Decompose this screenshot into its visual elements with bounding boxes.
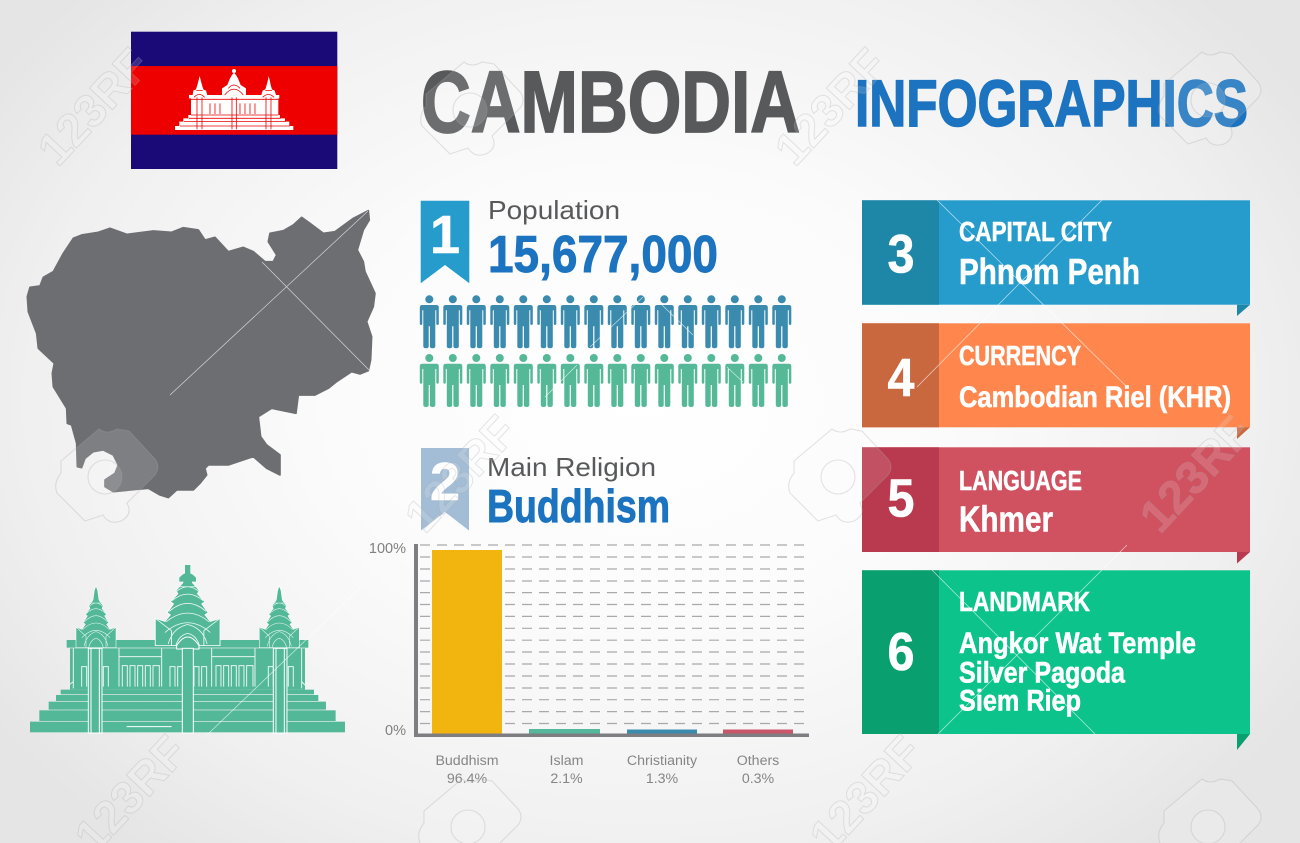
main religion value: Buddhism: [487, 480, 670, 532]
panel 5: language: Khmer: [959, 499, 1053, 540]
pictogram row: blue people: [420, 295, 791, 348]
panel 5: language: [862, 447, 1250, 564]
bar: Others: [723, 730, 793, 734]
panel 6: landmark: Silver Pagoda: [959, 657, 1125, 690]
panel 4: currency: 4: [888, 348, 914, 408]
panel 6: landmark: [862, 570, 1250, 750]
bar: Christianity: [627, 730, 697, 734]
category label: Others: 0.3%: [742, 771, 775, 787]
bar: Islam: [529, 729, 600, 734]
category label: Others: Others: [737, 753, 779, 769]
bar: Buddhism: [432, 550, 502, 734]
panel 6: landmark: Siem Riep: [959, 685, 1081, 718]
panel 4: currency: Cambodian Riel (KHR): [959, 381, 1231, 414]
category label: Christianity: 1.3%: [646, 771, 679, 787]
panel 3: capital city: CAPITAL CITY: [959, 216, 1112, 247]
flag of Cambodia: [131, 32, 337, 169]
watermark overlay: 123RF: [764, 38, 896, 175]
category label: Islam: Islam: [550, 753, 583, 769]
pictogram row: green people: [420, 354, 791, 407]
category label: Islam: 2.1%: [550, 771, 583, 787]
panel 5: language: 5: [888, 468, 914, 528]
map of Cambodia: [27, 211, 375, 498]
title: Cambodia: CAMBODIA: [421, 54, 800, 151]
panel 5: language: LANGUAGE: [959, 465, 1082, 496]
panel 6: landmark: LANDMARK: [959, 586, 1090, 617]
category label: Christianity: Christianity: [627, 753, 698, 769]
category label: Buddhism: 96.4%: [447, 771, 487, 787]
panel 3: capital city: 3: [888, 224, 914, 284]
panel 3: capital city: [862, 200, 1250, 316]
axis label: 0%: 0%: [385, 723, 406, 739]
ribbon badge 2: 2: [430, 452, 460, 512]
panel 4: currency: CURRENCY: [959, 340, 1081, 371]
population figure: 15,677,000: [488, 226, 718, 284]
chart axes: [414, 544, 809, 737]
heading: Main Religion: Main Religion: [487, 452, 656, 482]
ribbon badge 2: [421, 448, 469, 530]
icon: flag temple: [175, 69, 293, 130]
panel 6: landmark: 6: [888, 622, 914, 682]
ribbon badge 1: 1: [430, 205, 460, 265]
watermark overlay: 123RF: [27, 38, 159, 175]
bar chart: religion: [369, 541, 809, 787]
watermark overlay: 123RF: [1129, 405, 1261, 542]
panel 6: landmark: Angkor Wat Temple: [959, 627, 1196, 660]
heading: Population: Population: [488, 195, 620, 225]
illustration: Angkor Wat temple: [30, 564, 345, 733]
panel 3: capital city: Phnom Penh: [959, 251, 1140, 292]
panel 4: currency: [862, 323, 1250, 439]
axis label: 100%: 100%: [369, 541, 406, 557]
category label: Buddhism: Buddhism: [435, 753, 499, 769]
watermark overlay: 123RF: [394, 405, 526, 542]
ribbon badge 1: [421, 201, 469, 283]
